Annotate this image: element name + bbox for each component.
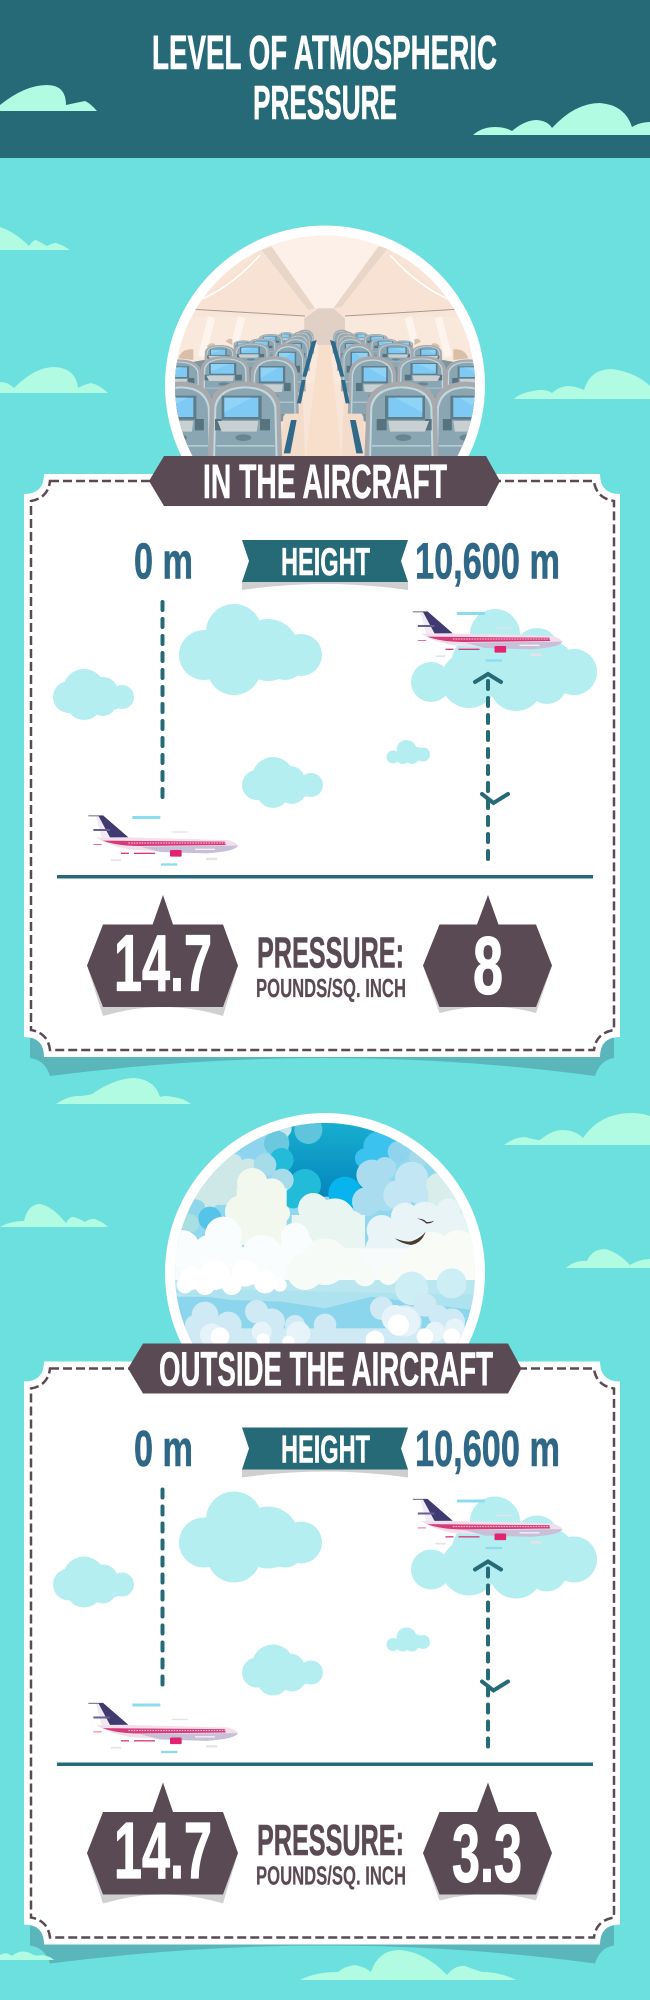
title bbox=[152, 27, 497, 130]
badge: pressure at altitude: 8 bbox=[473, 920, 503, 1012]
pressure label: PRESSURE: bbox=[257, 928, 404, 978]
sky window picture bbox=[165, 1113, 485, 1344]
cabin window picture bbox=[165, 226, 485, 456]
panel heading bbox=[128, 1344, 522, 1396]
icon: header cloud left bbox=[0, 85, 97, 111]
badge: pressure at altitude bbox=[423, 1782, 552, 1900]
pressure label: POUNDS/SQ. INCH bbox=[256, 1860, 406, 1890]
icon: plane in air bbox=[413, 1499, 562, 1549]
ground line bbox=[57, 875, 593, 878]
icon: plane on ground bbox=[88, 815, 238, 866]
badge: pressure at altitude bbox=[423, 895, 552, 1013]
height labels: 10,600 m bbox=[415, 532, 560, 590]
card bbox=[24, 474, 620, 1057]
title: PRESSURE bbox=[253, 77, 397, 130]
panel heading: IN THE AIRCRAFT bbox=[203, 456, 447, 509]
badge: pressure on ground: 14.7 bbox=[114, 918, 212, 1008]
icon: plane in air bbox=[413, 611, 562, 662]
panel heading bbox=[149, 456, 500, 509]
height ribbon bbox=[242, 540, 408, 590]
badge: pressure on ground: 14.7 bbox=[114, 1806, 212, 1895]
height ribbon: HEIGHT bbox=[281, 541, 370, 584]
height labels: 10,600 m bbox=[415, 1420, 560, 1477]
height labels: 0 m bbox=[134, 1420, 193, 1477]
badge: pressure on ground bbox=[87, 1782, 238, 1904]
height ribbon: HEIGHT bbox=[281, 1428, 370, 1472]
header band bbox=[0, 0, 650, 158]
height ribbon bbox=[242, 1428, 408, 1478]
pressure label: POUNDS/SQ. INCH bbox=[256, 973, 406, 1003]
card shadow bbox=[30, 1924, 614, 1964]
dashed line: ground reference bbox=[160, 1490, 164, 1684]
pressure label: PRESSURE: bbox=[257, 1816, 404, 1865]
height labels: 0 m bbox=[134, 532, 193, 590]
height labels bbox=[134, 532, 560, 590]
panel: outside the aircraft bbox=[24, 1113, 620, 1964]
clouds bbox=[53, 604, 597, 808]
icon: birds bbox=[395, 1219, 434, 1245]
pressure label bbox=[256, 1816, 406, 1890]
arrow: altitude bbox=[475, 1562, 508, 1754]
icon: bottom left cloud bbox=[0, 1952, 54, 1960]
icon: header cloud right bbox=[473, 103, 650, 135]
badge: pressure at altitude: 3.3 bbox=[452, 1808, 522, 1900]
dashed line: ground reference bbox=[160, 602, 164, 797]
ground line bbox=[57, 1762, 593, 1766]
height labels bbox=[134, 1420, 560, 1477]
icon: plane on ground bbox=[88, 1703, 238, 1753]
card shadow bbox=[30, 1036, 614, 1076]
panel: in the aircraft bbox=[24, 226, 620, 1076]
clouds bbox=[53, 1492, 597, 1696]
card bbox=[24, 1362, 620, 1944]
pressure label bbox=[256, 928, 406, 1003]
arrow: altitude bbox=[475, 674, 508, 866]
badge: pressure on ground bbox=[87, 895, 238, 1016]
